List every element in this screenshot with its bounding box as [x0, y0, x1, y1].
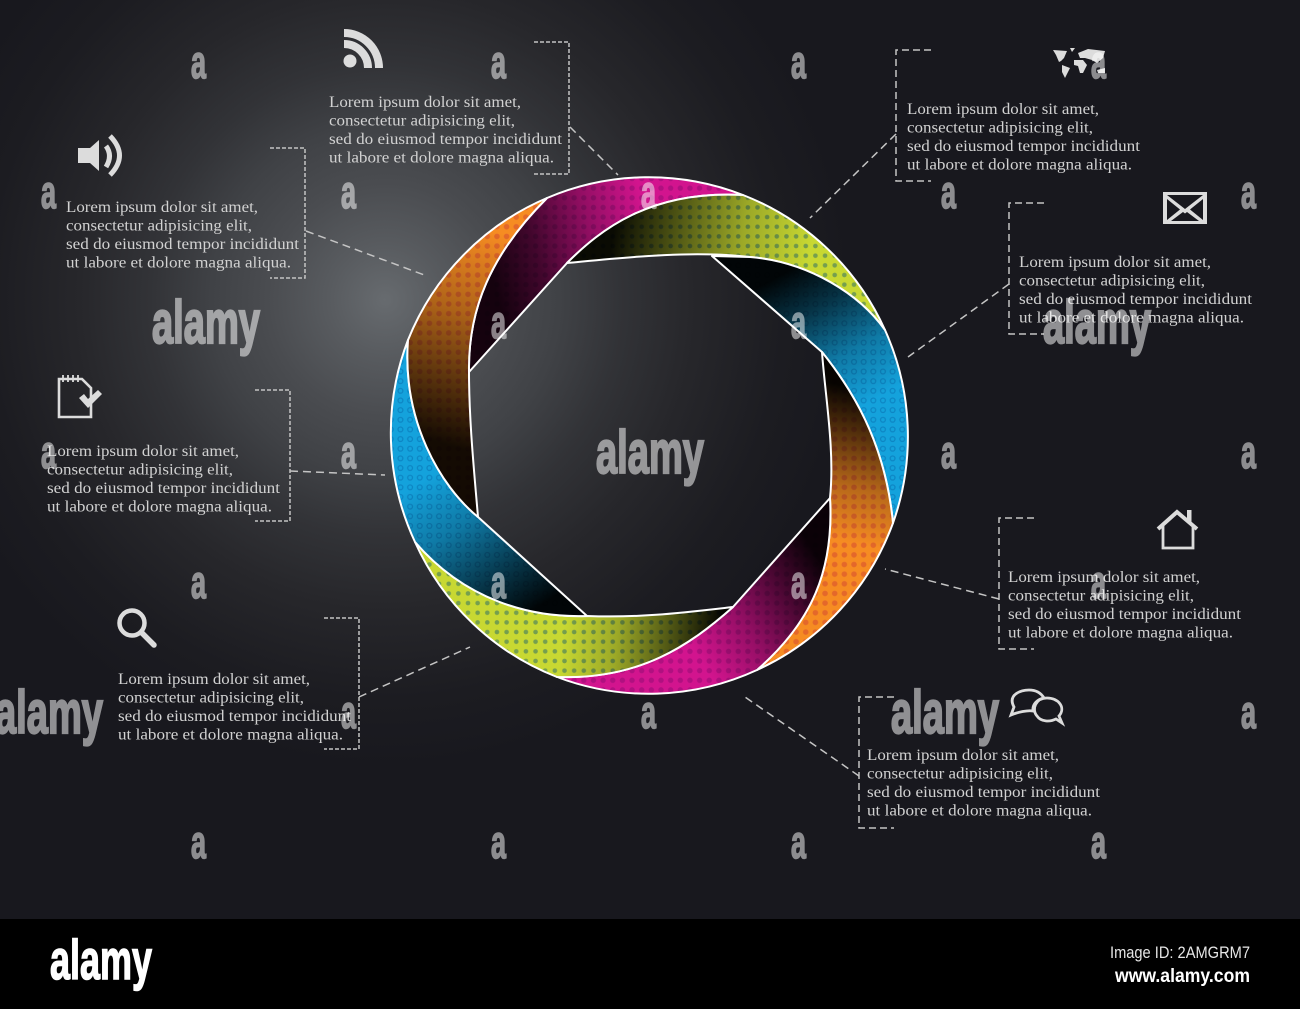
watermark: large marks: alamy	[596, 419, 704, 486]
band: bottom green	[415, 542, 733, 677]
watermark: small repeated marks: a	[341, 166, 356, 218]
callout: home bracket and connector	[885, 518, 1034, 649]
band: left orange	[407, 198, 547, 517]
callout: chat bracket and connector	[745, 697, 894, 828]
watermark: small repeated marks: a	[941, 426, 956, 478]
watermark: small repeated marks: a	[791, 556, 806, 608]
watermark: small repeated marks: a	[1091, 556, 1106, 608]
text block: notepad: consectetur adipisicing elit,	[47, 462, 233, 478]
watermark: large marks: alamy	[152, 289, 260, 356]
watermark: small repeated marks: a	[791, 816, 806, 868]
text block: search: sed do eiusmod tempor incididunt	[118, 708, 352, 725]
callout: search bracket and connector	[324, 618, 470, 749]
text block: home	[1008, 569, 1242, 642]
callout: rss bracket and connector	[534, 42, 618, 175]
icon: search	[120, 610, 154, 645]
text block: home: consectetur adipisicing elit,	[1008, 588, 1194, 604]
text block: rss: sed do eiusmod tempor incididunt	[329, 131, 563, 148]
text block: speaker	[66, 199, 300, 272]
watermark: small repeated marks: a	[1091, 36, 1106, 88]
watermark: small repeated marks: a	[1241, 166, 1256, 218]
text block: search: Lorem ipsum dolor sit amet,	[118, 671, 310, 688]
watermark: small repeated marks: a	[1091, 816, 1106, 868]
text block: mail: sed do eiusmod tempor incididunt	[1019, 291, 1253, 308]
text block: chat: sed do eiusmod tempor incididunt	[867, 784, 1101, 801]
text block: world: ut labore et dolore magna aliqua.	[907, 156, 1132, 174]
watermark: small repeated marks: a	[491, 556, 506, 608]
watermark: small repeated marks: a	[791, 296, 806, 348]
text block: world: Lorem ipsum dolor sit amet,	[907, 101, 1099, 118]
band: top magenta	[469, 177, 743, 372]
text block: rss: consectetur adipisicing elit,	[329, 112, 515, 130]
watermark: small repeated marks: a	[191, 36, 206, 88]
icon: envelope	[1163, 192, 1207, 224]
watermark: small repeated marks: a	[941, 166, 956, 218]
watermark: small repeated marks: a	[191, 816, 206, 868]
footer logo: alamy	[50, 928, 152, 991]
text block: chat	[867, 747, 1101, 820]
text block: speaker: Lorem ipsum dolor sit amet,	[66, 199, 258, 216]
text block: mail: ut labore et dolore magna aliqua.	[1019, 310, 1244, 326]
watermark: small repeated marks: a	[1241, 426, 1256, 478]
text block: chat: Lorem ipsum dolor sit amet,	[867, 747, 1059, 764]
icon: notepad with check	[59, 375, 102, 417]
callout: world bracket and connector	[810, 50, 931, 218]
text block: chat: ut labore et dolore magna aliqua.	[867, 802, 1092, 820]
watermark: large marks: alamy	[891, 679, 999, 746]
text block: search: consectetur adipisicing elit,	[118, 690, 304, 706]
footer url: www.alamy.com	[1114, 966, 1250, 987]
band: top-right green	[567, 195, 885, 330]
text block: speaker: sed do eiusmod tempor incididunt	[66, 236, 300, 253]
band: left blue	[391, 340, 587, 616]
watermark: small repeated marks: a	[641, 686, 656, 738]
text block: notepad: sed do eiusmod tempor incididunt	[47, 480, 281, 497]
text block: mail: consectetur adipisicing elit,	[1019, 272, 1205, 290]
text block: speaker: consectetur adipisicing elit,	[66, 218, 252, 234]
watermark: small repeated marks: a	[41, 426, 56, 478]
footer image id: Image ID: 2AMGRM7	[1110, 943, 1250, 962]
watermark: small repeated marks: a	[341, 426, 356, 478]
watermark: large marks: alamy	[1043, 289, 1151, 356]
ring diagram	[391, 177, 908, 694]
watermark: small repeated marks: a	[1241, 686, 1256, 738]
text block: world: sed do eiusmod tempor incididunt	[907, 138, 1141, 155]
text block: home: sed do eiusmod tempor incididunt	[1008, 606, 1242, 623]
watermark: small repeated marks: a	[641, 166, 656, 218]
watermark: small repeated marks: a	[41, 166, 56, 218]
watermark: small repeated marks: a	[791, 36, 806, 88]
band: bottom magenta	[557, 498, 830, 694]
text block: world: consectetur adipisicing elit,	[907, 120, 1093, 136]
footer bar	[0, 919, 1300, 1009]
text block: search	[118, 671, 352, 744]
callout: notepad bracket and connector	[255, 390, 385, 521]
text block: notepad: ut labore et dolore magna aliqua.	[47, 498, 272, 516]
watermark: small repeated marks: a	[491, 296, 506, 348]
watermark: small repeated marks	[41, 36, 1256, 868]
text block: notepad: Lorem ipsum dolor sit amet,	[47, 443, 239, 460]
text block: home: ut labore et dolore magna aliqua.	[1008, 624, 1233, 642]
text block: speaker: ut labore et dolore magna aliqua.	[66, 254, 291, 272]
text block: mail: Lorem ipsum dolor sit amet,	[1019, 254, 1211, 271]
watermark: large marks: alamy	[0, 679, 103, 746]
band: right blue	[712, 256, 908, 523]
text block: rss	[329, 94, 563, 166]
watermark: large marks	[0, 289, 1151, 746]
icon: chat bubbles	[1011, 690, 1062, 723]
text block: rss: ut labore et dolore magna aliqua.	[329, 150, 554, 166]
callout: mail bracket and connector	[908, 203, 1044, 357]
icon: rss	[344, 33, 379, 68]
icon: house	[1158, 510, 1197, 548]
icon: speaker	[78, 136, 120, 175]
text block: world	[907, 101, 1141, 174]
callout: speaker bracket and connector	[270, 148, 427, 278]
text block: notepad	[47, 443, 281, 516]
watermark: small repeated marks: a	[491, 816, 506, 868]
text block: rss: Lorem ipsum dolor sit amet,	[329, 94, 521, 111]
watermark: small repeated marks: a	[491, 36, 506, 88]
text block: mail	[1019, 254, 1253, 326]
watermark: small repeated marks: a	[191, 556, 206, 608]
watermark: small repeated marks: a	[341, 686, 356, 738]
text block: search: ut labore et dolore magna aliqua.	[118, 726, 343, 744]
band: right orange	[757, 352, 893, 670]
text block: home: Lorem ipsum dolor sit amet,	[1008, 569, 1200, 586]
text block: chat: consectetur adipisicing elit,	[867, 766, 1053, 782]
icon: world map	[1053, 48, 1105, 78]
